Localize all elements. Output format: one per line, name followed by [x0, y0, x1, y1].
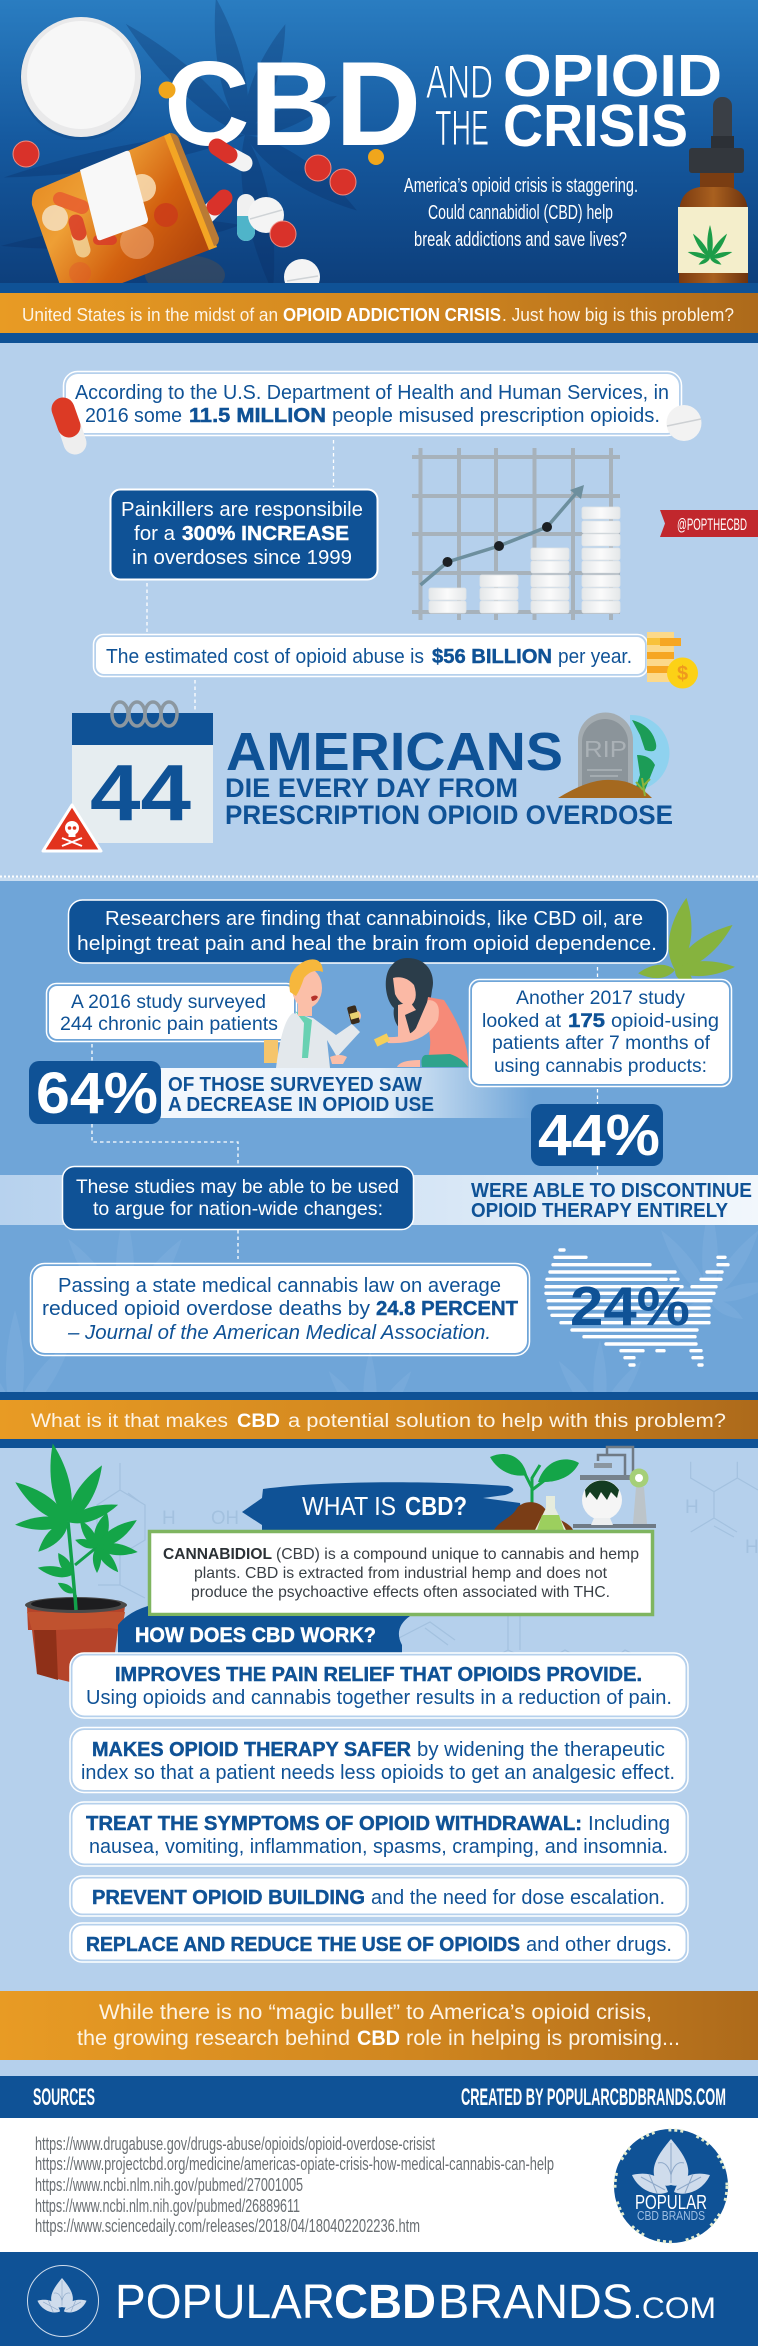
title: CBD — [164, 37, 421, 171]
panel: cost of opioid abuse: per year. — [558, 646, 632, 668]
panel: painkillers 300% increase — [110, 490, 378, 580]
illustration: doctor — [264, 959, 361, 1068]
panel: research section background — [0, 878, 758, 1450]
panel: 44% stat: WERE ABLE TO DISCONTINUE — [471, 1180, 752, 1202]
panel: source links: https://www.drugabuse.gov/drugs-abuse/opioids/opioid-overdose-crisist — [35, 2134, 435, 2154]
equipment stand — [573, 1447, 656, 1528]
panel: source links: https://www.ncbi.nlm.nih.gov/pubmed/27001005 — [35, 2175, 303, 2195]
icon: large white tablet — [20, 17, 142, 140]
card: improves pain relief — [70, 1653, 688, 1718]
trend arrow — [420, 485, 584, 585]
heading: 44 Americans die every day: AMERICANS — [226, 722, 563, 782]
panel: cost of opioid abuse — [94, 632, 698, 688]
panel: 2017 study: Another 2017 study — [516, 988, 685, 1009]
footer wordmark: POPULAR — [115, 2276, 335, 2329]
card: treat symptoms of withdrawal — [70, 1802, 688, 1866]
text block: header tagline — [404, 175, 638, 251]
footer wordmark: BRANDS — [438, 2276, 633, 2329]
illustration: seedling, flask and lab equipment — [490, 1447, 656, 1533]
chart: striped US map 24% — [546, 1250, 728, 1365]
panel: conclusion band: the growing research behind — [77, 2027, 350, 2050]
icon: calendar 44 — [72, 702, 213, 843]
background cannabis silhouette — [0, 0, 364, 295]
panel: 2016 study: 244 chronic pain patients — [60, 1014, 278, 1035]
flower pot — [25, 1595, 127, 1683]
text block: header tagline: America’s opioid crisis is staggering. — [404, 175, 638, 197]
card: improves pain relief: IMPROVES THE PAIN RELIEF THAT OPIOIDS PROVIDE. — [115, 1664, 642, 1686]
text block: header tagline: break addictions and save lives? — [414, 229, 627, 251]
card: prevent opioid building: PREVENT OPIOID BUILDING — [92, 1887, 365, 1909]
background molecule diagrams — [97, 1462, 758, 1670]
panel: sources heading bar: SOURCES — [33, 2084, 95, 2111]
banner: how does CBD work — [118, 1606, 410, 1654]
icon: green leaf — [638, 896, 738, 985]
panel: conclusion band — [0, 1991, 758, 2060]
panel: cannabidiol definition: CANNABIDIOL — [163, 1546, 272, 1563]
panel: 64% stat: OF THOSE SURVEYED SAW — [168, 1074, 422, 1096]
panel: painkillers 300% increase: 300% INCREASE — [182, 523, 349, 545]
panel: conclusion band: While there is no “magic bullet” to America’s opioid crisis, — [99, 2001, 652, 2024]
soil — [494, 1502, 573, 1530]
panel: 2017 study — [470, 980, 732, 1086]
panel: misused prescription opioids: According to the U.S. Department of Health and Human Services, in — [75, 382, 669, 404]
card: prevent opioid building — [70, 1876, 688, 1916]
icon: capsule — [63, 409, 75, 443]
molecule atom labels: H — [162, 1508, 176, 1529]
molecule atom labels — [162, 1497, 758, 1558]
footer wordmark: CBD — [334, 2276, 436, 2329]
panel: sources heading bar — [0, 2076, 758, 2118]
illustration: patient — [374, 958, 468, 1067]
heading band: what makes CBD a solution — [0, 1400, 758, 1439]
bars: pill stacks — [429, 507, 620, 613]
card: improves pain relief: Using opioids and cannabis together results in a reduction of pain. — [86, 1687, 672, 1709]
heading: 44 Americans die every day: PRESCRIPTION OPIOID OVERDOSE — [225, 800, 673, 830]
flask — [535, 1496, 566, 1533]
panel: painkillers 300% increase: in overdoses since 1999 — [132, 547, 352, 569]
panel: 64% stat: 64% — [36, 1061, 158, 1126]
text block: header tagline: Could cannabidiol (CBD) help — [428, 202, 613, 224]
logo badge: POPULAR — [635, 2192, 707, 2214]
decorative header bars — [0, 283, 758, 343]
banner: how does CBD work: HOW DOES CBD WORK? — [135, 1624, 376, 1647]
heading: 44 Americans die every day — [225, 722, 673, 830]
card: treat symptoms of withdrawal: nausea, vomiting, inflammation, spasms, cramping, and insomnia. — [89, 1836, 668, 1858]
tag: @POPTHECBD — [660, 510, 758, 537]
panel: source links: https://www.projectcbd.org/medicine/americas-opiate-crisis-how-medical-cannabis-can-help — [35, 2154, 554, 2174]
card: replace and reduce: REPLACE AND REDUCE THE USE OF OPIOIDS — [86, 1934, 520, 1956]
chart: striped US map 24%: 24% — [570, 1275, 690, 1337]
panel: painkillers 300% increase: for a — [134, 523, 176, 545]
calendar rings — [112, 702, 177, 726]
panel: misused prescription opioids — [63, 372, 702, 443]
heading band: opioid addiction crisis — [0, 293, 758, 333]
banner: what is CBD — [242, 1482, 525, 1530]
panel: 44% stat — [471, 1103, 752, 1222]
panel: state medical cannabis law — [30, 1264, 530, 1356]
icon: stacked coins: $ — [677, 663, 688, 685]
card: makes therapy safer: index so that a patient needs less opioids to get an analgesic effect. — [81, 1762, 675, 1784]
footer wordmark: .COM — [633, 2292, 716, 2325]
panel: cannabidiol definition — [150, 1532, 652, 1614]
card: treat symptoms of withdrawal: TREAT THE SYMPTOMS OF OPIOID WITHDRAWAL: — [86, 1813, 582, 1835]
heading band: what makes CBD a solution: CBD — [237, 1411, 280, 1432]
sprout — [524, 1465, 545, 1505]
panel: nation-wide changes: to argue for nation-wide changes: — [93, 1199, 383, 1220]
icon: green leaf on label — [687, 225, 733, 266]
card: treat symptoms of withdrawal: Including — [588, 1813, 670, 1835]
panel: 44% stat: OPIOID THERAPY ENTIRELY — [471, 1200, 729, 1222]
background leaves — [0, 1205, 758, 1450]
title: AND — [426, 55, 493, 108]
panel: state medical cannabis law: Passing a state medical cannabis law on average — [58, 1275, 501, 1297]
heading: 44 Americans die every day: DIE EVERY DAY FROM — [225, 773, 518, 803]
panel: cost of opioid abuse: The estimated cost of opioid abuse is — [106, 646, 424, 668]
panel: 44% stat: 44% — [538, 1103, 660, 1168]
panel: state medical cannabis law: 24.8 PERCENT — [376, 1298, 518, 1320]
connector lines — [92, 967, 598, 1259]
icon: stacked coins — [647, 632, 698, 688]
icon: tombstone and globe: RIP — [584, 736, 627, 762]
panel: researchers are finding: Researchers are finding that cannabinoids, like CBD oil, are — [105, 908, 643, 930]
panel: header background — [0, 0, 758, 295]
title: OPIOID — [503, 43, 722, 109]
title: THE — [435, 100, 489, 156]
icon: CBD oil dropper bottle — [678, 97, 748, 290]
card: replace and reduce: and other drugs. — [526, 1934, 672, 1956]
panel: 2016 study — [46, 984, 296, 1042]
panel: 2017 study: opioid-using — [611, 1011, 719, 1032]
panel: state medical cannabis law: reduced opioid overdose deaths by — [42, 1298, 370, 1320]
panel: 2016 study: A 2016 study surveyed — [71, 992, 266, 1013]
heading band: what makes CBD a solution: a potential solution to help with this problem? — [288, 1411, 726, 1432]
panel: 2017 study: 175 — [568, 1011, 606, 1032]
heading band: opioid addiction crisis: OPIOID ADDICTION CRISIS — [283, 305, 501, 325]
panel: nation-wide changes — [62, 1166, 414, 1230]
panel: conclusion band: CBD — [357, 2027, 400, 2050]
chart: rising pill stacks — [412, 448, 620, 620]
panel: 64% stat: A DECREASE IN OPIOID USE — [168, 1094, 434, 1116]
panel: source links: https://www.ncbi.nlm.nih.gov/pubmed/26889611 — [35, 2196, 300, 2216]
card: replace and reduce — [70, 1923, 688, 1962]
icon: tablet — [666, 405, 702, 441]
logo badge — [614, 2129, 728, 2243]
panel: 2017 study: patients after 7 months of — [492, 1033, 711, 1054]
heading band: opioid addiction crisis: . Just how big is this problem? — [502, 305, 734, 325]
icon: calendar 44: 44 — [90, 748, 192, 837]
panel: footer brand — [0, 2252, 758, 2346]
panel: 64% stat — [29, 1061, 532, 1126]
title: CRISIS — [503, 93, 688, 159]
illustration: potted cannabis plant — [10, 1442, 140, 1683]
panel: misused prescription opioids: 11.5 MILLION — [189, 405, 326, 427]
molecule atom labels: OH — [211, 1508, 239, 1529]
decorative strip — [0, 1175, 758, 1225]
heading band: opioid addiction crisis: United States is in the midst of an — [22, 305, 278, 325]
card: makes therapy safer: by widening the therapeutic — [417, 1739, 665, 1761]
icon: loose pills — [13, 82, 384, 295]
panel: researchers are finding — [68, 900, 668, 963]
banner: what is CBD: CBD? — [405, 1491, 467, 1521]
panel: misused prescription opioids: 2016 some — [85, 405, 182, 427]
title — [164, 37, 722, 171]
panel: cannabidiol definition: plants. CBD is extracted from industrial hemp and does not — [194, 1565, 608, 1582]
logo badge: CBD BRANDS — [637, 2208, 705, 2223]
panel: state medical cannabis law: – Journal of the American Medical Association. — [67, 1322, 491, 1344]
panel: 2017 study: looked at — [482, 1011, 562, 1032]
icon: warning triangle with skull — [43, 805, 101, 851]
panel: cannabidiol definition: (CBD) is a compound unique to cannabis and hemp — [276, 1546, 639, 1563]
decorative section divider — [0, 876, 758, 878]
icon: spilled orange pill bottle — [32, 133, 225, 295]
panel: cannabidiol definition: produce the psychoactive effects often associated with THC. — [191, 1584, 610, 1601]
decorative dark bars — [0, 1392, 758, 1448]
card: prevent opioid building: and the need for dose escalation. — [371, 1887, 665, 1909]
heading band: what makes CBD a solution: What is it that makes — [31, 1411, 228, 1432]
panel: 2017 study: using cannabis products: — [494, 1056, 707, 1077]
main leaf — [10, 1442, 140, 1596]
card: makes therapy safer — [70, 1728, 688, 1792]
panel: painkillers 300% increase: Painkillers are responsibile — [121, 499, 363, 521]
connector lines — [147, 440, 334, 712]
panel: misused prescription opioids: people misused prescription opioids. — [332, 405, 660, 427]
icon: tombstone and globe — [558, 712, 669, 798]
panel: cost of opioid abuse: $56 BILLION — [432, 646, 552, 668]
banner: what is CBD: WHAT IS — [302, 1491, 396, 1521]
card: makes therapy safer: MAKES OPIOID THERAPY SAFER — [92, 1739, 412, 1761]
panel: source links: https://www.sciencedaily.com/releases/2018/04/180402202236.htm — [35, 2216, 420, 2236]
footer logo — [28, 2266, 98, 2336]
molecule atom labels: H — [685, 1497, 699, 1518]
panel: nation-wide changes: These studies may be able to be used — [76, 1177, 399, 1198]
panel: conclusion band: role in helping is promising... — [406, 2027, 680, 2050]
panel: researchers are finding: helpingt treat pain and heal the brain from opioid dependence. — [77, 933, 657, 955]
panel: source links — [0, 2118, 758, 2252]
footer wordmark — [115, 2276, 716, 2329]
